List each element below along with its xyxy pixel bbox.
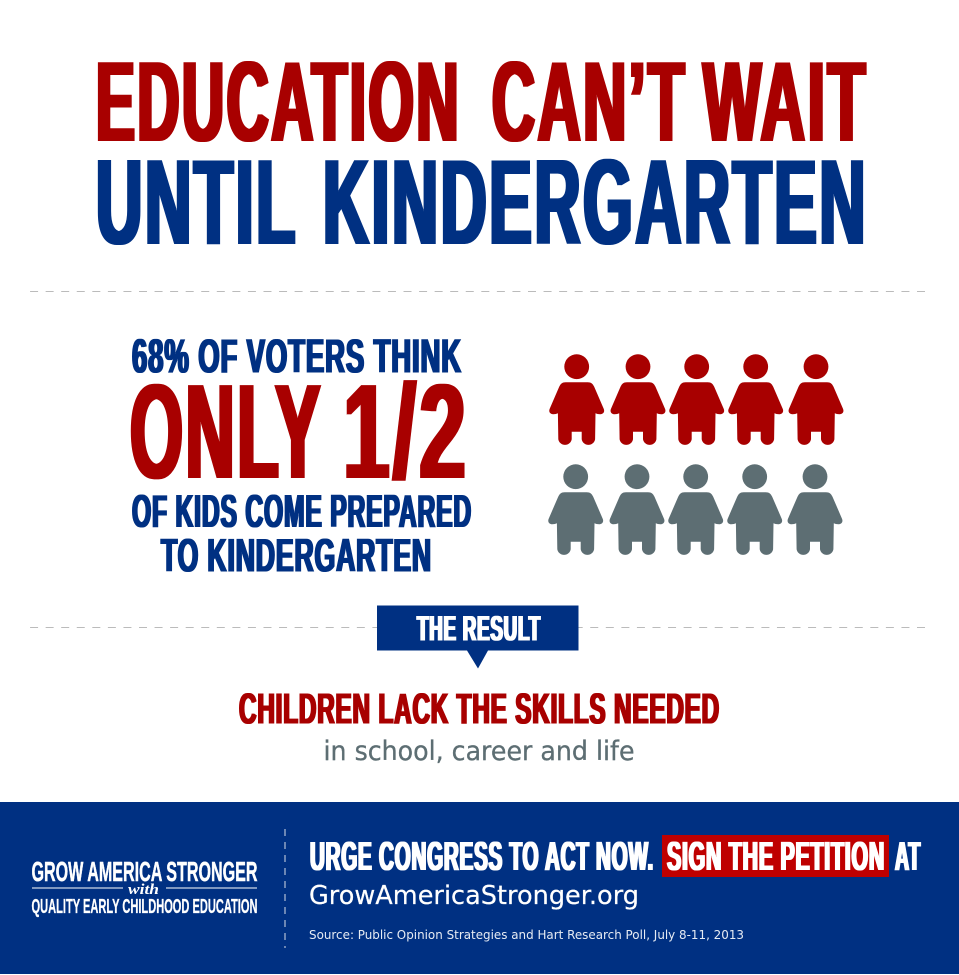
footer logo: Grow America Stronger: QUALITY EARLY CHILDHOOD EDUCATION [32, 896, 258, 918]
statistic lead-in: 68% OF VOTERS THINK [132, 330, 462, 384]
callout: the result: THE RESULT [417, 610, 541, 648]
title line 1: EDUCATION [96, 39, 461, 166]
statistic text block [130, 330, 472, 582]
title line 2: UNTIL [96, 134, 298, 270]
title [96, 39, 868, 270]
statistic conclusion [132, 485, 472, 582]
statistic figure: ONLY [130, 356, 323, 507]
statistic conclusion: OF KIDS COME PREPARED [132, 485, 472, 537]
footer logo: Grow America Stronger: GROW AMERICA STRONGER [32, 856, 258, 887]
panel: footer banner: AT [895, 833, 921, 879]
footer logo: Grow America Stronger: with [128, 882, 159, 898]
result subtext: in school, career and life [324, 736, 634, 767]
statistic figure: 1/2 [343, 356, 469, 507]
website: GrowAmericaStronger.org [309, 881, 639, 911]
icon row: five red children [549, 354, 843, 445]
icon row: five grey children [548, 464, 842, 555]
footer logo: Grow America Stronger [32, 856, 258, 918]
statistic conclusion: TO KINDERGARTEN [161, 528, 432, 582]
callout: the result [377, 606, 578, 668]
source note: Source: Public Opinion Strategies and Hart Research Poll, July 8-11, 2013 [309, 928, 744, 942]
panel: footer banner [0, 802, 959, 974]
title line 2 [96, 134, 868, 270]
title line 1: CAN’T [492, 39, 687, 166]
pictogram: ten children [548, 354, 843, 555]
